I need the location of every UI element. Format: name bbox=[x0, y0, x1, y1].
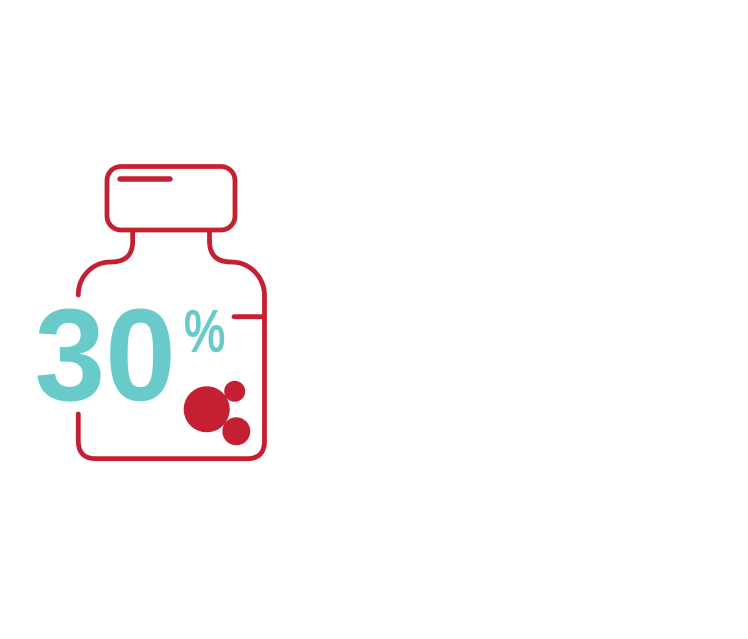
large bubble bbox=[184, 386, 230, 432]
icon: medicine bottle bbox=[78, 166, 264, 459]
top bubble bbox=[224, 381, 245, 402]
bottom bubble bbox=[222, 417, 250, 445]
level tick bbox=[234, 314, 264, 319]
cap highlight bbox=[120, 176, 170, 182]
bottle body outline bbox=[78, 231, 264, 459]
bottle cap bbox=[107, 166, 235, 230]
statistic: percent sign: % bbox=[184, 299, 225, 364]
statistic: 30: 30 bbox=[34, 282, 176, 428]
icon: bubbles bbox=[184, 381, 250, 445]
